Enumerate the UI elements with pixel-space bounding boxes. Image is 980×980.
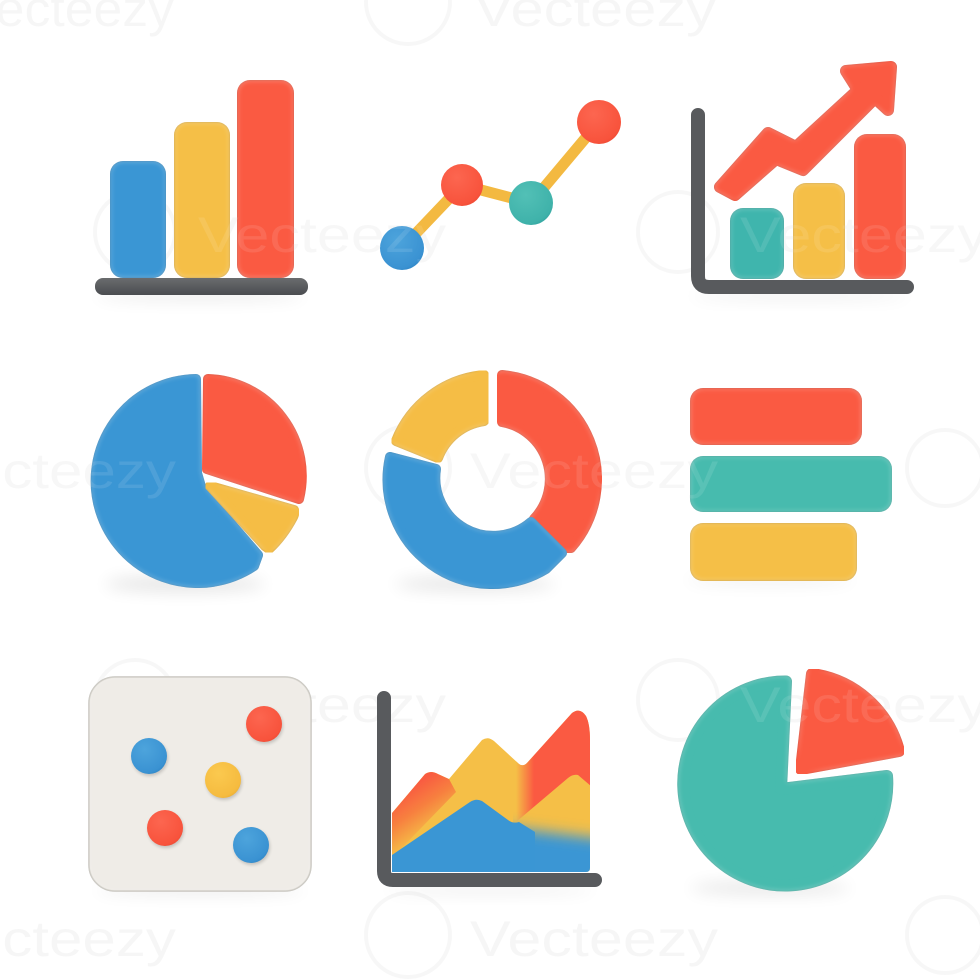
icon: pie chart [96,379,302,592]
icon: line chart with dots [380,100,621,270]
watermark overlay on icons: Vecteezy [740,207,980,263]
icon: bar chart [95,80,308,300]
watermark: Vecteezy [740,677,980,733]
icon: scatter plot [89,677,311,894]
icon: donut chart [388,375,597,591]
icon: area chart [377,691,602,887]
watermark overlay on icons: Vecteezy [470,443,718,499]
icon: horizontal bars [685,388,892,584]
watermark overlay on icons [0,207,980,733]
watermark overlay on icons: Vecteezy [198,207,446,263]
watermark: Vecteezy [470,443,718,499]
watermark: Vecteezy [198,677,446,733]
watermark: Vecteezy [198,207,446,263]
watermark: Vecteezy [740,207,980,263]
watermark: Vecteezy [470,911,718,967]
icon: growth bars with arrow [690,67,910,299]
icon: pie chart with slice [683,674,899,895]
watermark overlay on icons: Vecteezy [740,677,980,733]
